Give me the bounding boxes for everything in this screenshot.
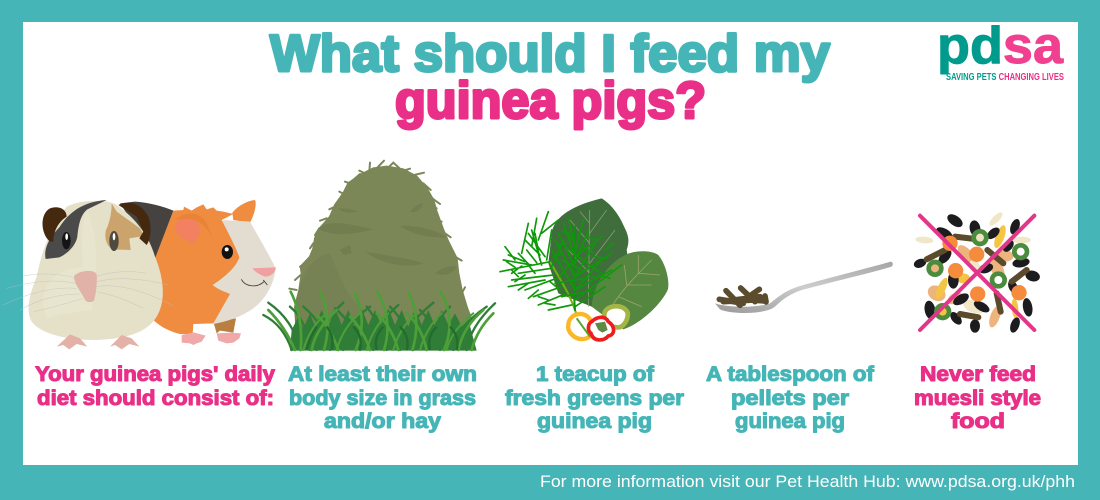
- label: fresh greens: 1 teacup of: [536, 363, 655, 386]
- label: muesli warning: Never feed: [920, 363, 1036, 386]
- label: grass and hay: and/or hay: [324, 410, 441, 433]
- label: pellets: guinea pig: [735, 410, 845, 433]
- cross: [920, 216, 1034, 330]
- green rings: [929, 231, 1027, 318]
- title: guinea pigs?: [395, 72, 706, 130]
- grass: [263, 292, 495, 351]
- hay pile: [289, 161, 472, 332]
- logo: pdsa: SAVING PETS CHANGING LIVES: [946, 72, 1064, 83]
- dark back patch: [120, 202, 173, 258]
- light leaf: [592, 251, 668, 329]
- label: muesli warning: food: [951, 410, 1005, 433]
- dill: [500, 212, 622, 315]
- label: daily diet: [35, 363, 275, 410]
- label: daily diet: diet should consist of:: [37, 387, 274, 410]
- green pepper ring: [604, 306, 628, 327]
- logo: pdsa: pdsa: [937, 17, 1064, 75]
- sunflower seeds: [913, 212, 1041, 334]
- illustration: fresh greens: [500, 198, 668, 340]
- yellow pepper ring: [568, 314, 593, 339]
- label: grass and hay: body size in grass: [289, 387, 476, 410]
- label: fresh greens: [505, 363, 684, 433]
- illustration: spoon of pellets: [715, 262, 893, 313]
- title: What should I feed my: [270, 25, 830, 83]
- spoon: [715, 262, 893, 313]
- illustration: hay and grass: [263, 161, 495, 351]
- label: grass and hay: At least their own: [288, 363, 477, 386]
- tan and cream pieces: [915, 211, 1031, 329]
- label: daily diet: Your guinea pigs' daily: [35, 363, 275, 386]
- orange pieces: [942, 236, 1027, 302]
- red pepper ring: [588, 317, 614, 340]
- label: fresh greens: guinea pig: [537, 410, 652, 433]
- illustration: muesli with cross: [913, 211, 1041, 334]
- dark leaf: [548, 198, 628, 307]
- footer link text: For more information visit our Pet Health Hub: www.pdsa.org.uk/phh: [540, 472, 1075, 491]
- label: muesli warning: muesli style: [914, 387, 1041, 410]
- pellets: [927, 237, 1027, 317]
- pellets: [719, 288, 766, 305]
- label: muesli warning: [914, 363, 1041, 433]
- orange guinea pig: [153, 200, 276, 345]
- label: fresh greens: fresh greens per: [505, 387, 684, 410]
- illustration: guinea pigs: [3, 200, 276, 349]
- front guinea pig: [3, 200, 173, 349]
- hay shading: [295, 203, 457, 332]
- label: pellets: pellets per: [731, 387, 849, 410]
- title: [270, 25, 830, 130]
- label: grass and hay: [288, 363, 477, 433]
- label: pellets: [706, 363, 875, 433]
- label: pellets: A tablespoon of: [706, 363, 875, 386]
